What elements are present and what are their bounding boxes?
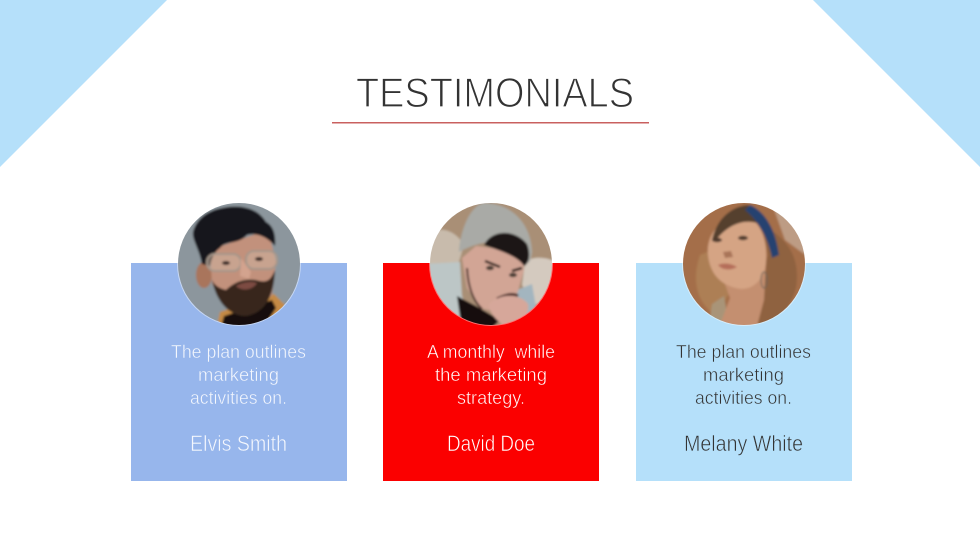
panel: Elvis Smith [131, 195, 347, 481]
testimonial text: marketing [198, 365, 279, 385]
testimonial text: The plan outlines [171, 342, 306, 362]
testimonial text: The plan outlines [676, 342, 811, 362]
testimonial text: strategy. [457, 388, 525, 408]
portrait: David Doe [429, 203, 553, 326]
decorative corner: top left [0, 0, 167, 167]
testimonial text: activities on. [190, 388, 287, 408]
testimonial text: A monthly while [427, 342, 555, 362]
card background [131, 263, 347, 481]
name: Elvis Smith [190, 431, 287, 456]
testimonial text: the marketing [435, 365, 547, 385]
testimonial text [676, 342, 811, 408]
panel: David Doe [383, 195, 599, 481]
portrait: Elvis Smith [177, 203, 301, 326]
decorative corner: top right [813, 0, 980, 167]
testimonial text [427, 342, 555, 408]
panel: Melany White [636, 195, 852, 481]
title: TESTIMONIALS [356, 69, 634, 116]
testimonial text: marketing [703, 365, 784, 385]
name: Melany White [684, 431, 803, 456]
card background [383, 263, 599, 481]
title underline [332, 122, 649, 124]
testimonial text: activities on. [695, 388, 792, 408]
testimonial text [171, 342, 306, 408]
name: David Doe [447, 431, 535, 456]
portrait: Melany White [682, 203, 806, 326]
card background [636, 263, 852, 481]
